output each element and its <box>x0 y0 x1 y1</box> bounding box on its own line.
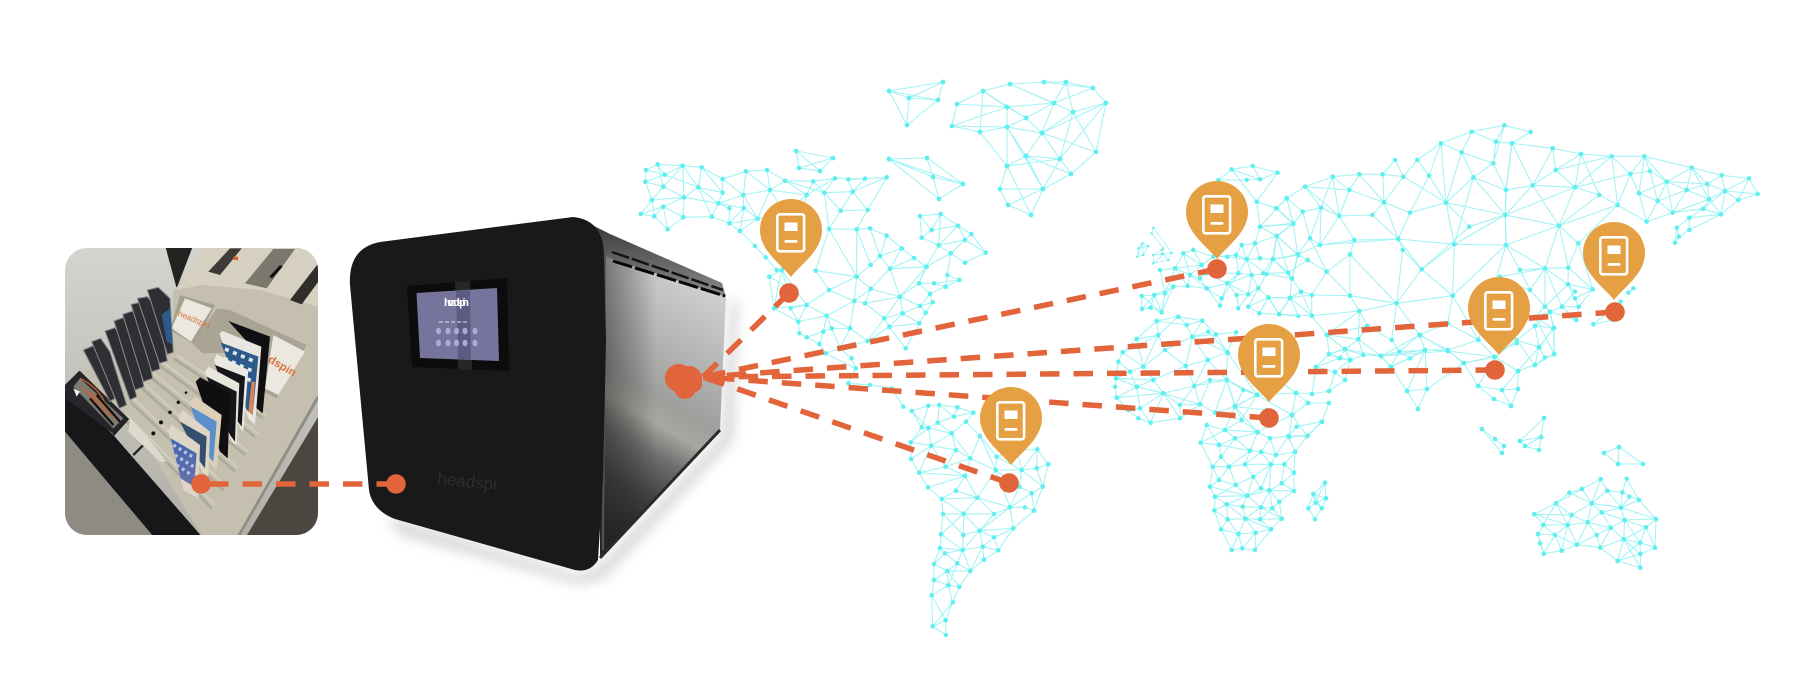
dot on device <box>386 474 406 494</box>
map: Europe and North Africa <box>1115 166 1298 423</box>
location pins <box>760 181 1645 465</box>
black frame <box>65 392 203 538</box>
tray body <box>80 245 323 538</box>
device side panel <box>600 245 726 556</box>
pin: Europe <box>1186 181 1248 259</box>
map: North America <box>641 164 986 407</box>
screen logo text: headspin <box>444 297 469 309</box>
wall <box>60 245 327 542</box>
location dots <box>779 259 1625 493</box>
route to South America <box>703 377 1009 483</box>
world map mesh <box>641 82 1758 635</box>
connector box <box>65 371 167 462</box>
dark right floor <box>247 418 318 535</box>
route to Africa <box>703 377 1269 418</box>
dashed routes from locations to device <box>703 269 1615 483</box>
map: South America <box>911 405 1048 635</box>
route to North America <box>703 293 789 377</box>
dark phones <box>83 287 173 408</box>
map: Horn of Africa <box>1225 353 1329 437</box>
pad logo right: dspin <box>266 354 298 379</box>
map: South East Asia <box>1312 312 1554 409</box>
pin: South America <box>980 387 1042 465</box>
map: Iceland and British Isles <box>1137 228 1172 263</box>
device bottom edge <box>600 430 720 558</box>
device front face <box>350 217 606 571</box>
white pads <box>172 298 212 342</box>
connection: photo to device <box>191 474 406 494</box>
map: Southern Africa <box>1201 420 1326 550</box>
pad logo: headspin <box>177 308 212 330</box>
device shadow <box>385 300 738 585</box>
source blob on device side <box>665 364 702 399</box>
photo: phones in tray <box>60 245 327 542</box>
map: Asia east <box>1500 125 1758 365</box>
screen keypad <box>436 328 478 346</box>
black cabinet wedge <box>166 248 192 288</box>
route to East Asia <box>703 312 1615 377</box>
tray ridges <box>123 355 266 508</box>
right phones <box>228 321 270 413</box>
map: Arctic islands <box>796 82 963 199</box>
device chrome trim <box>603 250 605 550</box>
map: Indonesia and islands <box>1482 418 1643 464</box>
device: headspin appliance <box>350 217 738 585</box>
tray pockets <box>170 295 215 345</box>
pin: Africa <box>1238 324 1300 402</box>
device top vents <box>590 224 726 297</box>
route to South East Asia <box>703 370 1495 377</box>
map: Greenland <box>952 82 1106 215</box>
map: Asia west <box>1260 125 1512 367</box>
device screen <box>407 278 509 371</box>
map: Australia <box>1534 479 1656 568</box>
concrete floor <box>65 432 152 535</box>
tray holes <box>151 391 187 435</box>
pin: Japan <box>1583 222 1645 300</box>
pin: South East Asia <box>1468 277 1530 355</box>
route to Europe <box>703 269 1217 377</box>
dot on phone <box>191 474 211 494</box>
top slots <box>208 248 242 275</box>
pin: North America <box>760 199 822 277</box>
device logo: headspi <box>437 469 498 494</box>
